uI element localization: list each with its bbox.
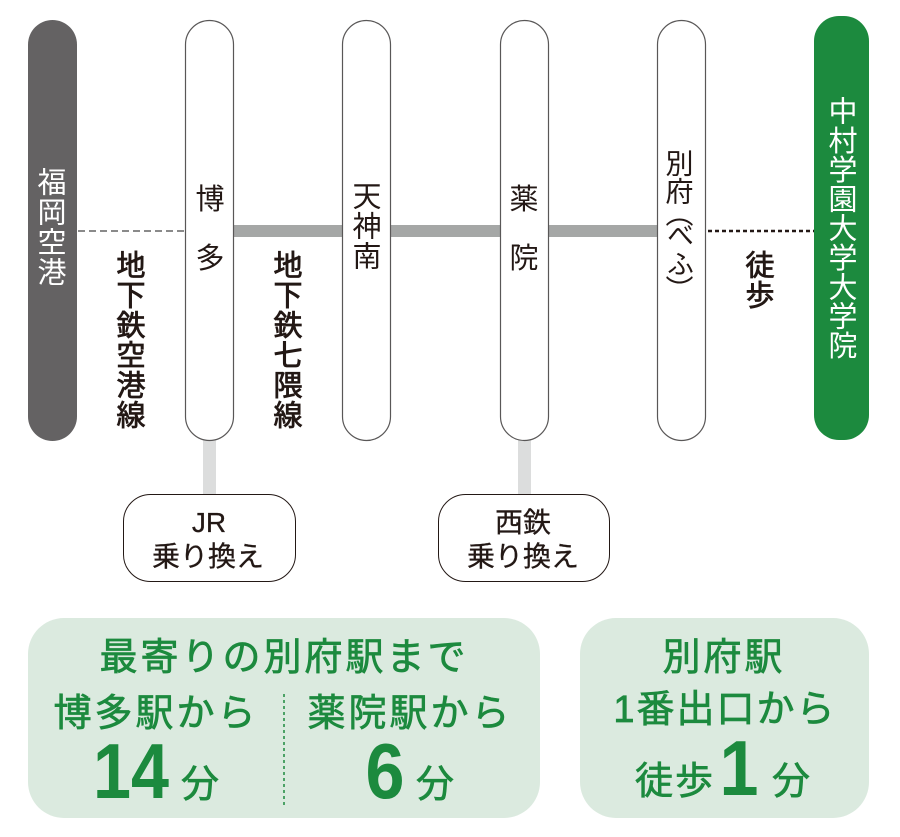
station: Beppu: べ: [663, 221, 693, 248]
text: walk 1 minute: 1: [720, 724, 758, 812]
text: walk 1 minute: 徒歩: [635, 761, 715, 803]
station: Beppu: ふ: [663, 250, 693, 277]
station: Hakata: 多: [195, 242, 225, 275]
connector: Yakuin to Nishitetsu: [518, 440, 531, 495]
callout: Nishitetsu transfer: 乗り換え: [467, 541, 579, 572]
label: Nanakuma line: 地下鉄七隈線: [269, 250, 302, 430]
station: Tenjin-Minami: [342, 20, 390, 440]
callout: JR transfer: JR: [192, 507, 226, 538]
connector: subway Nanakuma line: [234, 225, 658, 237]
station: Hakata: 博: [195, 183, 225, 216]
destination: Nakamura Gakuen University: 中村学園大学大学院: [824, 96, 858, 360]
station: Beppu: ）: [662, 275, 694, 303]
text: exit 1: 1番出口から: [613, 689, 837, 731]
number: 14 minutes: 14: [93, 727, 169, 815]
callout: JR transfer: 乗り換え: [152, 541, 264, 572]
station: Beppu: [658, 20, 706, 440]
text: Beppu station: 別府駅: [662, 637, 786, 679]
connector: Hakata to JR: [203, 440, 216, 495]
station: Beppu: 別府: [662, 149, 694, 205]
callout: Nishitetsu transfer: 西鉄: [495, 507, 551, 538]
label: airport line: 地下鉄空港線: [112, 250, 146, 430]
text: from Yakuin: 薬院駅から: [307, 693, 513, 735]
destination: Nakamura Gakuen University: [814, 16, 869, 440]
number: 14 minutes: [93, 727, 219, 815]
callout: JR transfer: [124, 494, 296, 582]
divider: [283, 694, 285, 805]
panel: walking time: [580, 618, 869, 818]
station: Hakata: [186, 20, 234, 440]
text: walk 1 minute: 分: [772, 761, 810, 803]
connector: airport to Hakata dashed line: [78, 230, 186, 232]
number: 6 minutes: 分: [416, 764, 454, 806]
station: Fukuoka Airport: [28, 20, 77, 441]
connector: walking dotted line: [708, 230, 815, 232]
station: Yakuin: 院: [509, 242, 539, 275]
station: Yakuin: 薬: [509, 183, 539, 216]
text: walk 1 minute: [635, 724, 810, 812]
number: 6 minutes: [366, 727, 454, 815]
station: Yakuin: [500, 20, 548, 440]
station: Fukuoka Airport: 福岡空港: [33, 167, 66, 287]
number: 14 minutes: 分: [181, 764, 219, 806]
label: walk: 徒歩: [741, 250, 774, 310]
heading: to nearest station: 最寄りの別府駅まで: [99, 637, 469, 679]
station: Beppu: （: [662, 199, 694, 227]
station: Tenjin-Minami: 天神南: [348, 181, 382, 271]
number: 6 minutes: 6: [366, 727, 404, 815]
panel: travel time to Beppu station: [28, 618, 540, 818]
text: from Hakata: 博多駅から: [53, 693, 259, 735]
callout: Nishitetsu transfer: [438, 494, 610, 582]
